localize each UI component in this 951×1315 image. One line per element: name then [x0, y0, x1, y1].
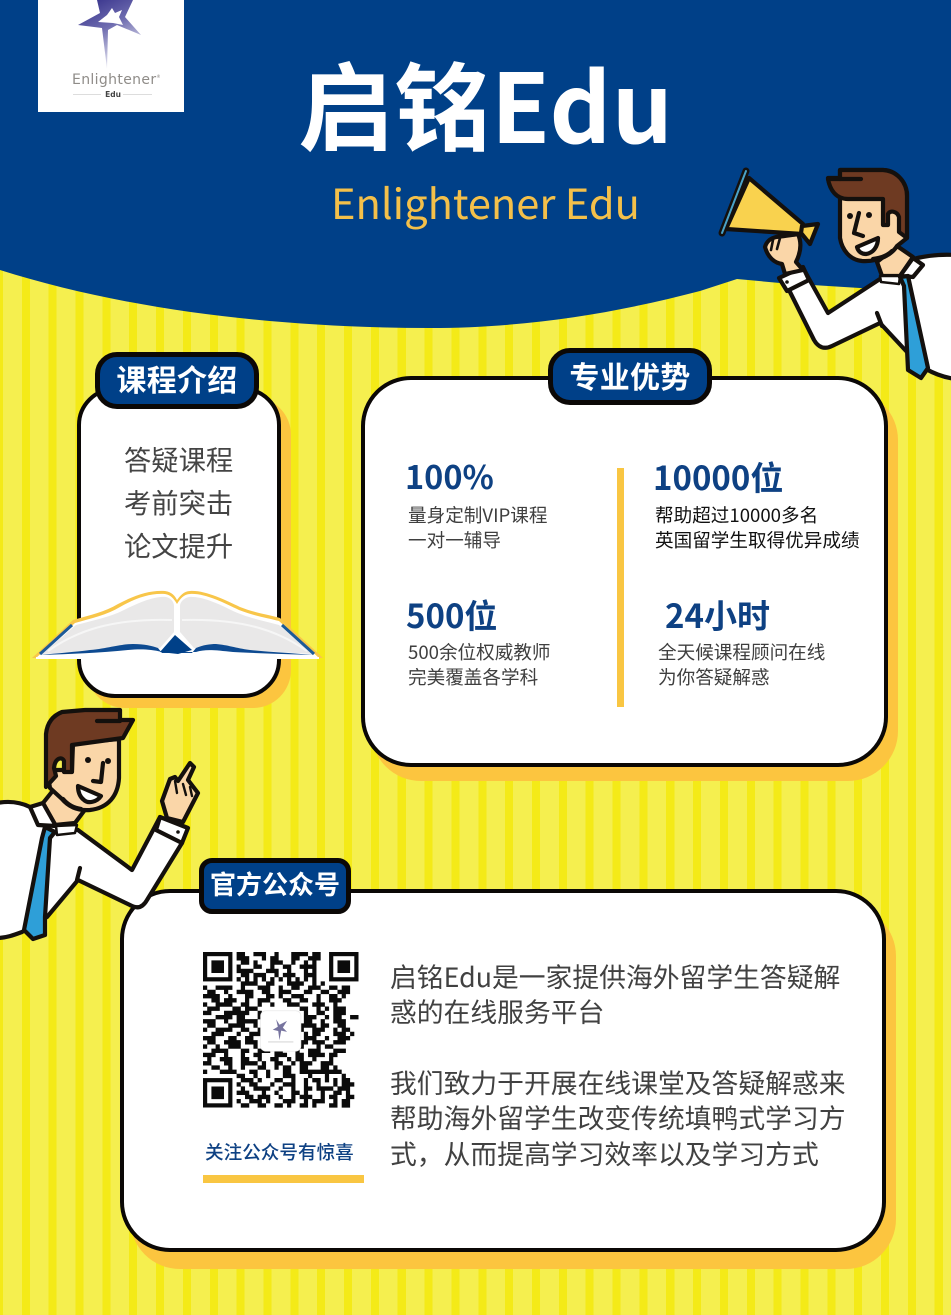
- stat: 100%: [405, 452, 547, 553]
- stat description: 量身定制VIP课程: [408, 501, 547, 528]
- stat description: 全天候课程顾问在线: [658, 638, 825, 665]
- stat: 10000: [653, 452, 860, 553]
- course list item: 考前突击: [124, 481, 233, 521]
- course heading: [95, 352, 259, 409]
- description line: 式，从而提高学习效率以及学习方式: [390, 1133, 819, 1172]
- stat number: 500位: [406, 590, 497, 638]
- course list item: 论文提升: [124, 524, 233, 564]
- icon: star: [78, 0, 141, 68]
- character: man pointing: [0, 708, 200, 942]
- account card: [120, 889, 886, 1252]
- QR caption underline: [203, 1175, 364, 1183]
- logo wordmark: Enlightener®: [72, 72, 161, 88]
- description line: 惑的在线服务平台: [390, 991, 604, 1030]
- stat description: 帮助超过10000多名: [655, 501, 818, 528]
- stat: 500: [406, 590, 551, 690]
- panel: professional advantages: [361, 348, 898, 781]
- course list item: 答疑课程: [124, 438, 233, 478]
- stat number: 24小时: [665, 590, 770, 638]
- description line: 启铭Edu是一家提供海外留学生答疑解: [390, 956, 840, 995]
- QR caption: 关注公众号有惊喜: [205, 1138, 354, 1165]
- character: man with megaphone: [718, 168, 951, 380]
- panel: official account: [120, 858, 896, 1269]
- advantages heading: [548, 348, 712, 405]
- stat description: 完美覆盖各学科: [408, 663, 538, 690]
- divider bar: [617, 468, 624, 707]
- stat: 24 hours: [658, 590, 825, 690]
- course card: [77, 387, 281, 698]
- account heading: [199, 858, 351, 914]
- stat number: 100%: [405, 452, 494, 499]
- stat description: 一对一辅导: [408, 526, 501, 553]
- logo sublabel: [73, 91, 153, 98]
- subtitle: Enlightener Edu: [331, 171, 640, 231]
- description text: [390, 956, 846, 1172]
- description line: 帮助海外留学生改变传统填鸭式学习方: [390, 1097, 846, 1136]
- stat description: 为你答疑解惑: [658, 663, 770, 690]
- stat description: 英国留学生取得优异成绩: [655, 526, 860, 553]
- panel: course intro: [32, 352, 323, 708]
- stat description: 500余位权威教师: [408, 638, 551, 665]
- icon: open book: [32, 590, 323, 659]
- title: 启铭Edu: [298, 32, 673, 171]
- account heading: 官方公众号: [210, 865, 340, 902]
- advantages heading: 专业优势: [569, 353, 691, 397]
- QR code: [203, 952, 358, 1108]
- logo: [38, 0, 184, 112]
- blue header wave: [0, 0, 951, 328]
- description line: 我们致力于开展在线课堂及答疑解惑来: [390, 1062, 846, 1101]
- stat number: 10000位: [653, 452, 783, 500]
- logo sublabel: Edu: [105, 90, 121, 99]
- advantages card: [361, 376, 888, 767]
- course heading: 课程介绍: [116, 356, 238, 400]
